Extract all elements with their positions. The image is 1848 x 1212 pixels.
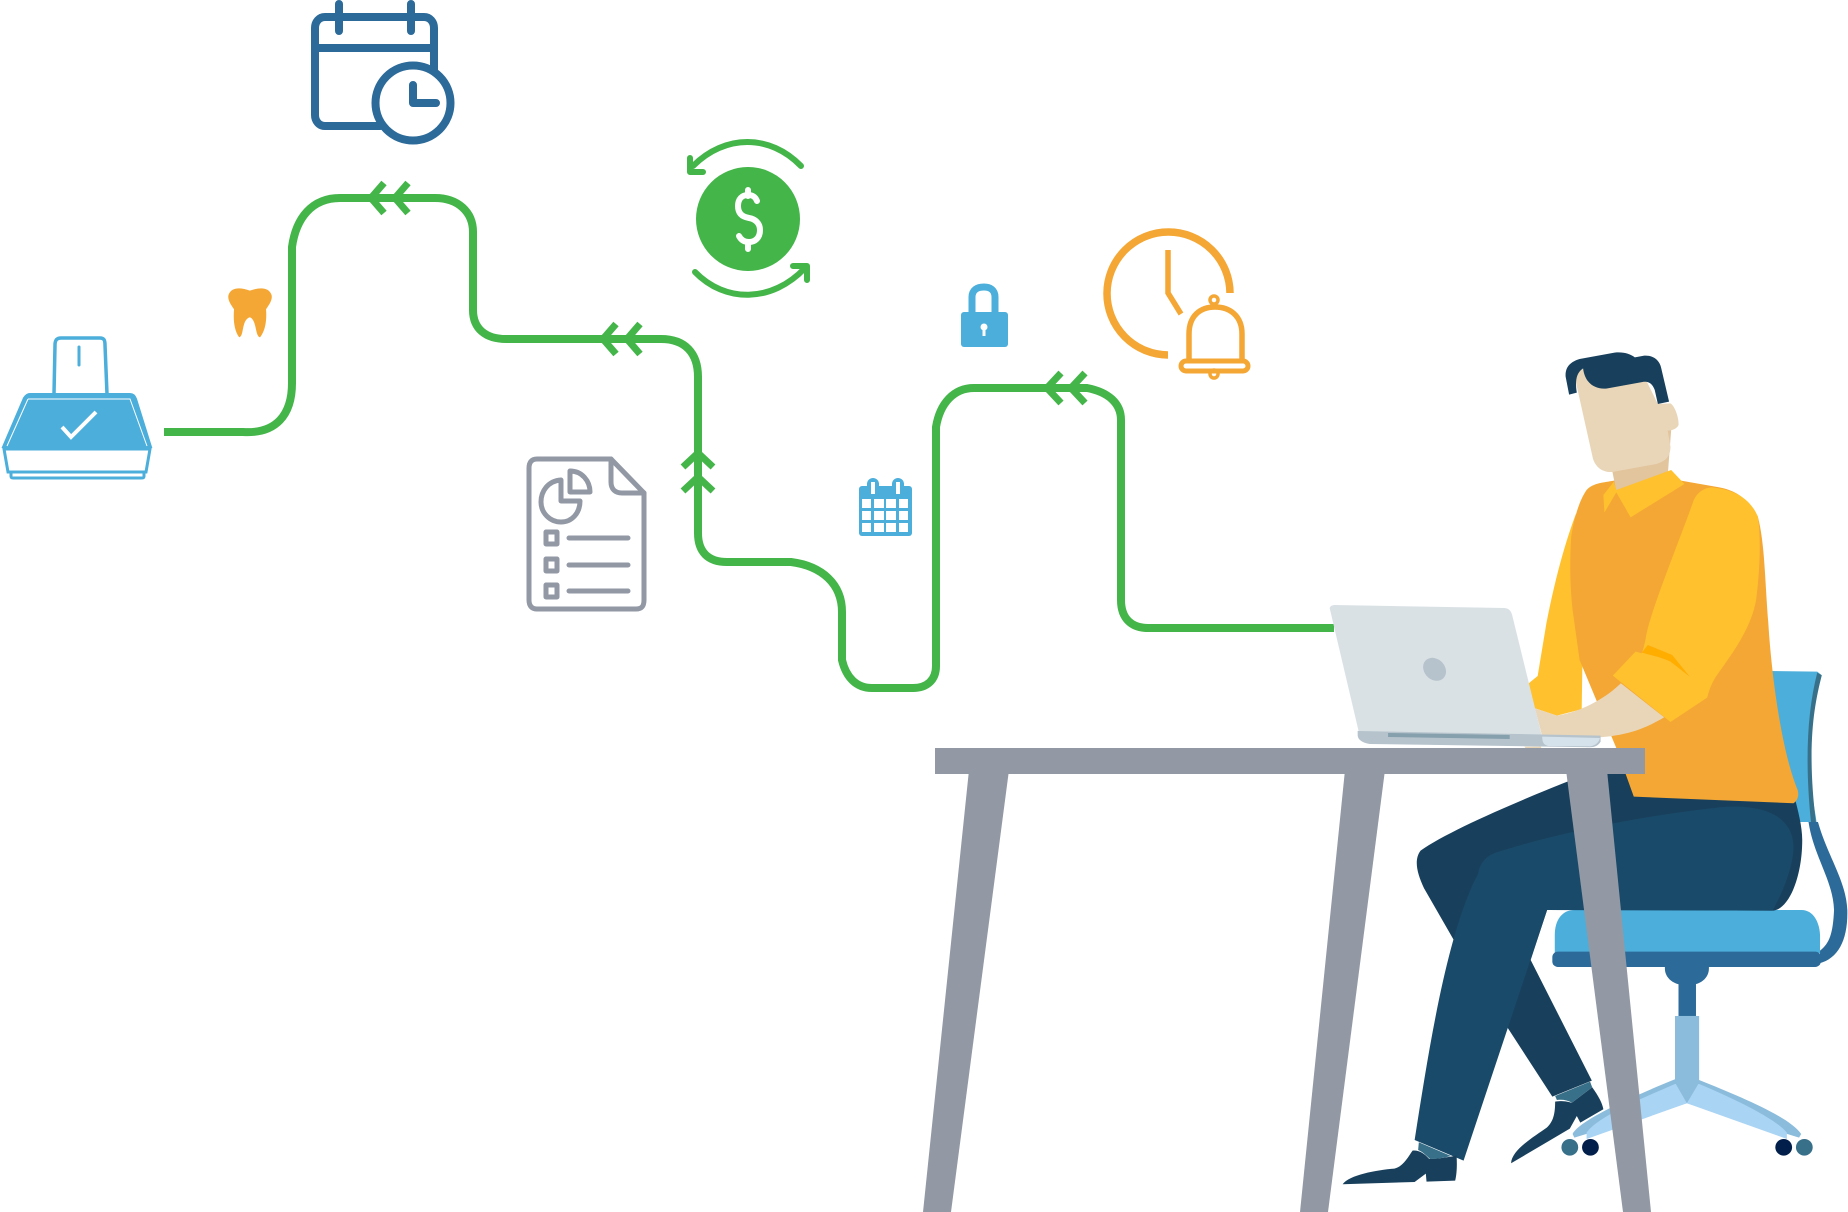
chair seat and base [1552, 910, 1821, 1156]
chair strut [1809, 822, 1847, 963]
vest [1570, 481, 1798, 803]
icon: report document [529, 459, 644, 609]
trousers [1415, 770, 1802, 1161]
shoes [1343, 1082, 1603, 1184]
desk [923, 748, 1651, 1212]
office chair [1552, 671, 1847, 1156]
icon: scanner tray [3, 338, 151, 478]
icon: tooth [228, 288, 272, 337]
chair back [1768, 671, 1822, 822]
left sleeve [1525, 513, 1582, 716]
head [1566, 352, 1684, 517]
arm and hand [1524, 487, 1760, 751]
icon: small calendar [859, 478, 912, 536]
icon: padlock [961, 287, 1008, 347]
icon: clock with bell [1107, 232, 1248, 378]
icon: calendar with clock [315, 4, 450, 140]
icon: dollar with circular arrows [690, 142, 807, 295]
green journey path [164, 183, 1334, 688]
person at desk [1343, 352, 1802, 1184]
laptop [1330, 605, 1601, 747]
